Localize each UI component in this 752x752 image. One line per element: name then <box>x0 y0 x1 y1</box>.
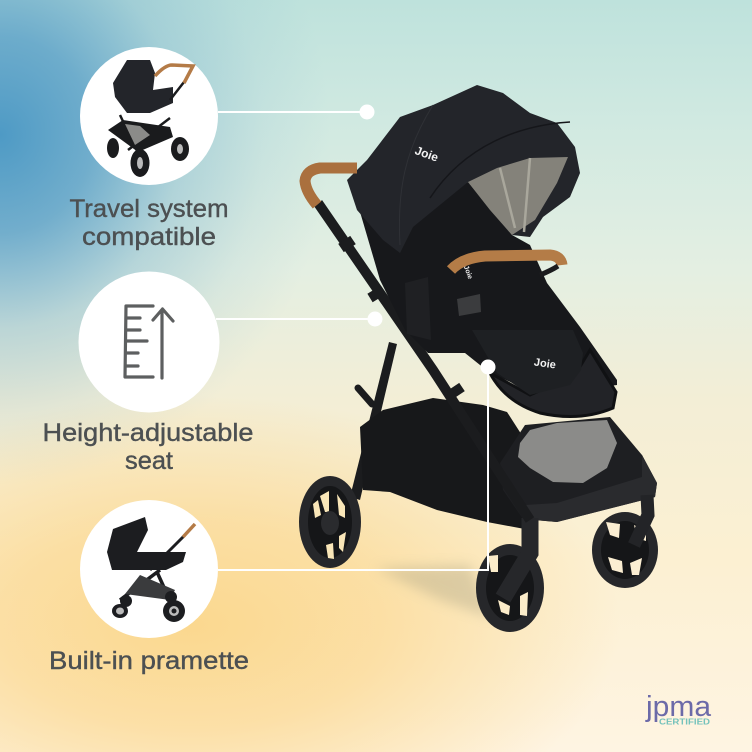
label: travel system: compatible <box>82 223 216 251</box>
tan bumper bar <box>451 255 562 270</box>
seat mesh window <box>518 420 617 483</box>
canopy back panel <box>347 85 580 253</box>
rear leg <box>350 342 397 500</box>
harness logo: Joie <box>462 265 473 280</box>
label: height adjustable: seat <box>125 447 173 475</box>
feature 1: travel system <box>80 47 218 185</box>
buckle <box>457 294 481 316</box>
jpma certified logo: jpma <box>645 691 712 723</box>
callout line 1 <box>218 104 374 120</box>
circle <box>80 47 218 185</box>
footrest tray <box>490 350 616 417</box>
logo on pillow: Joie <box>533 357 557 371</box>
circle <box>80 500 218 638</box>
basket <box>360 398 530 530</box>
rear wheel <box>299 476 361 568</box>
jpma certified logo: CERTIFIED <box>659 716 710 726</box>
canopy logo: Joie <box>413 143 441 165</box>
footmuff pillow <box>472 330 583 395</box>
icon: stroller with carrycot <box>107 517 195 622</box>
armrest clip <box>405 277 431 340</box>
label: built-in pramette: Built-in pramette <box>49 647 249 675</box>
feature 3: built-in pramette <box>80 500 218 638</box>
label: height adjustable: Height-adjustable <box>42 419 254 447</box>
circle <box>78 272 220 412</box>
main stroller photo <box>299 85 658 632</box>
icon: stroller with car seat <box>107 60 193 177</box>
canopy inner mesh <box>468 157 568 235</box>
front wheel <box>476 544 544 632</box>
right fork <box>634 495 648 545</box>
base tray <box>500 417 657 522</box>
front fork <box>503 518 530 598</box>
seat body <box>358 182 617 395</box>
label: travel system: Travel system <box>70 195 228 223</box>
feature 2: height adjustable <box>78 272 220 412</box>
label: height adjustable <box>42 419 254 475</box>
ground shadow <box>375 565 492 618</box>
right front wheel <box>592 512 658 588</box>
canopy seam <box>430 122 570 198</box>
icon: ruler with up arrow <box>125 306 173 378</box>
label: travel system <box>70 195 228 251</box>
main frame tube <box>318 203 530 520</box>
callout line 3 <box>218 360 496 570</box>
callout line 2 <box>216 312 382 326</box>
tan handle <box>305 168 357 205</box>
